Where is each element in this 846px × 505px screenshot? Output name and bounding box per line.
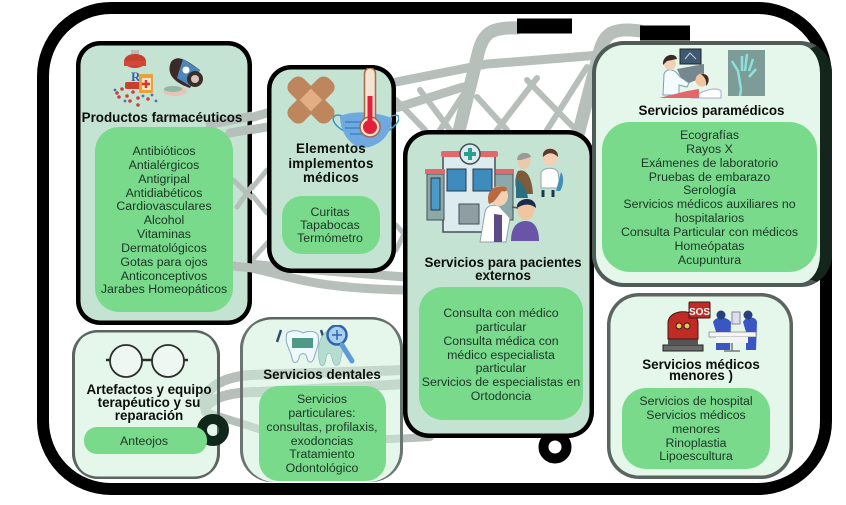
heading: reparación (115, 408, 183, 422)
list text: Tapabocas (300, 218, 360, 232)
list text: Vitaminas (137, 227, 191, 241)
list text: Homeópatas (674, 239, 744, 253)
panel: servicios medicos menores (607, 293, 793, 479)
list text (101, 144, 227, 296)
list text: Servicios de especialistas en (422, 375, 580, 389)
list text: Servicios de hospital (639, 394, 753, 408)
list text: Servicios médicos (646, 408, 746, 422)
icon: ultrasound and x-ray (659, 48, 765, 98)
icon: bandage, mask and thermometer (287, 68, 399, 148)
list text: Ecografías (680, 128, 739, 142)
heading (424, 255, 582, 283)
list text: Antidiabéticos (126, 186, 202, 200)
list text: Jarabes Homeopáticos (101, 282, 227, 296)
list text (422, 306, 580, 403)
list box (84, 427, 207, 454)
heading: externos (475, 268, 531, 283)
list text: Ortodoncia (471, 389, 531, 403)
list text: menores (672, 422, 720, 436)
list text: Tratamiento (289, 447, 355, 461)
list box (259, 386, 386, 481)
heading: menores ) (669, 368, 733, 382)
list text: Consulta con médico (443, 306, 559, 320)
panel: artefactos y equipo terapeutico (72, 330, 220, 479)
list text: médico especialista (447, 348, 555, 362)
list text: Servicios médicos auxiliares no (623, 197, 796, 211)
list text (266, 392, 378, 475)
list text: hospitalarios (675, 211, 744, 225)
wheelchair bands crossing the panel (206, 112, 252, 272)
list text: Gotas para ojos (120, 255, 208, 269)
heading: Servicios dentales (263, 367, 381, 382)
list text: Alcohol (144, 213, 184, 227)
icon: hospital, doctors and patients (425, 143, 564, 242)
list box (282, 196, 380, 254)
list text: Rayos X (686, 142, 733, 156)
list text: Antibióticos (132, 144, 196, 158)
list text: Consulta Particular con médicos (621, 225, 798, 239)
list text: exodoncias (291, 434, 353, 448)
icon: wheelchair wheel (197, 414, 229, 446)
heading: Servicios para pacientes (424, 255, 582, 270)
list text: Termómetro (297, 231, 363, 245)
panel: productos farmaceuticos (76, 41, 252, 325)
icon: medicine bottles and pills (114, 50, 203, 107)
list text: particular (476, 320, 526, 334)
panel: servicios paramedicos (592, 41, 832, 287)
list text: Antialérgicos (129, 158, 199, 172)
icon: emergency siren and surgeons: SOS (689, 307, 710, 318)
heading: Productos farmacéuticos (82, 110, 242, 125)
list text: Curitas (310, 205, 350, 219)
list text: particulares: (288, 406, 356, 420)
list box (95, 127, 233, 312)
list text: Serología (683, 183, 736, 197)
heading: Artefactos y equipo (86, 382, 212, 396)
heading: Servicios paramédicos (639, 103, 784, 118)
heading (642, 357, 760, 383)
list text: Rinoplastia (665, 436, 727, 450)
list text: Acupuntura (678, 253, 741, 267)
list box (602, 122, 816, 272)
icon: eyeglasses (106, 344, 188, 378)
heading: Elementos implementos médicos (288, 141, 374, 185)
list text: Lipoescultura (659, 449, 733, 463)
list text: Antigripal (138, 172, 190, 186)
list text: Servicios (297, 392, 347, 406)
icon: emergency siren and surgeons (662, 302, 757, 352)
icon: teeth and magnifier (276, 325, 354, 366)
list text: particular (476, 361, 526, 375)
list text: consultas, profilaxis, (266, 420, 378, 434)
list text (297, 205, 363, 245)
list box (622, 388, 770, 469)
heading: terapéutico y su (98, 394, 200, 410)
panel: servicios para pacientes externos (403, 130, 594, 438)
list text: Odontológico (286, 461, 358, 475)
list text: Consulta médica con (443, 334, 559, 348)
panel: elementos implementos medicos (267, 65, 396, 273)
list text: Dermatológicos (121, 241, 207, 255)
list text: Cardiovasculares (116, 199, 212, 213)
heading (86, 382, 212, 423)
list text: Anticonceptivos (121, 269, 207, 283)
list text (621, 128, 798, 267)
heading: Servicios médicos (642, 357, 760, 372)
list text: Exámenes de laboratorio (641, 156, 778, 170)
icon: medicine bottles and pills: R (131, 69, 141, 84)
list box (419, 287, 583, 420)
list text: Anteojos (120, 434, 168, 448)
panel: servicios dentales (240, 317, 403, 482)
list text (639, 394, 753, 463)
list text: Pruebas de embarazo (649, 170, 770, 184)
